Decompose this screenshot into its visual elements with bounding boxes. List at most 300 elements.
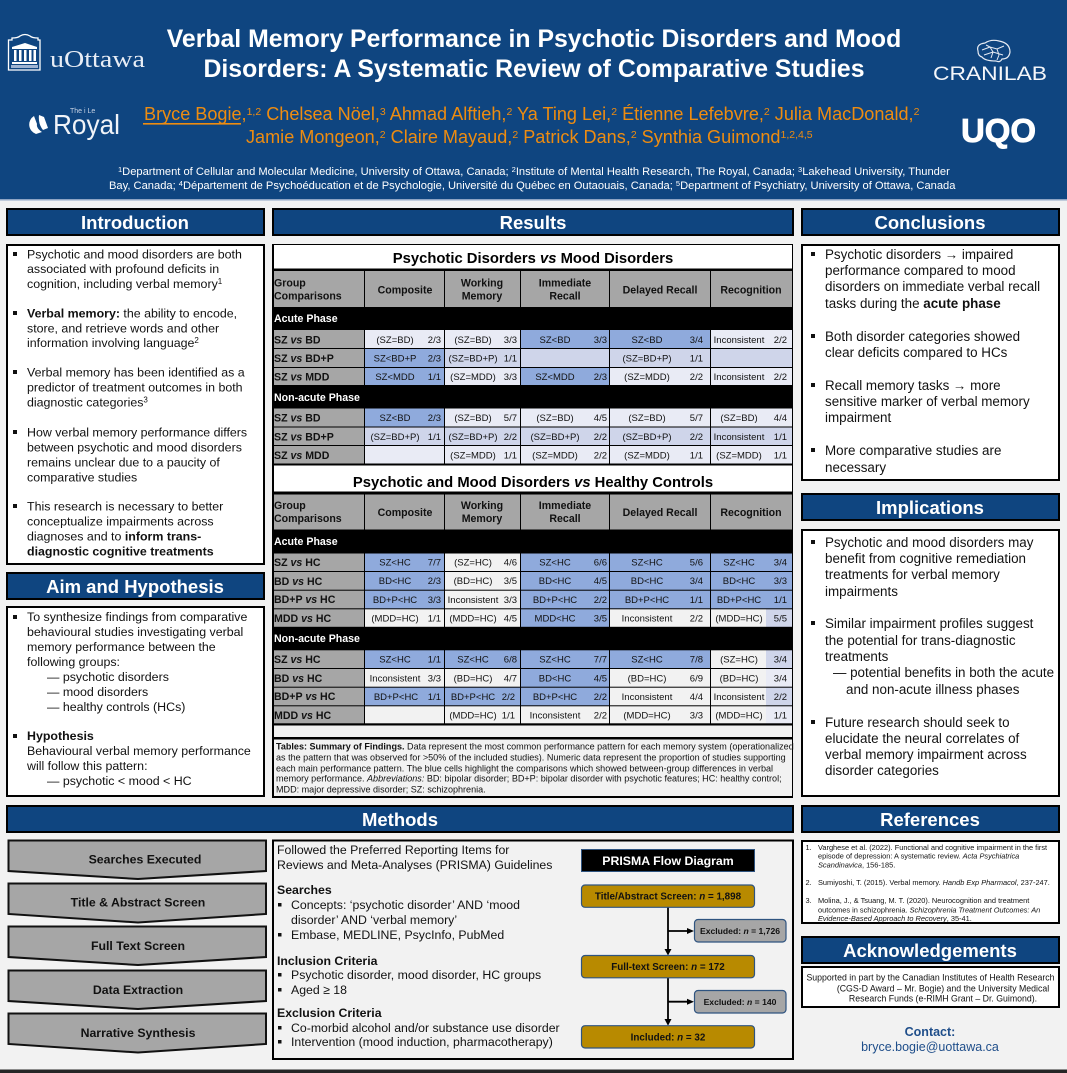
conclusion: psychotic disorders xyxy=(811,247,1040,311)
authors: Ahmad Alftieh, xyxy=(386,104,506,124)
hypothesis text: will follow this pattern: xyxy=(26,759,148,773)
PRISMA statement: Reviews and Meta-Analyses (PRISMA) Guidelines xyxy=(277,858,552,872)
search criteria: Concepts: ‘psychotic disorder’ AND ‘mood xyxy=(291,898,520,912)
row: SZ vs MDD acute: SZ<MDD xyxy=(375,372,415,383)
row: SZ vs HC non-acute: SZ<HC xyxy=(631,654,663,666)
inclusion criteria: Inclusion Criteria xyxy=(277,954,378,968)
hypothesis text: Behavioural verbal memory performance xyxy=(27,744,251,758)
row: SZ vs HC non-acute: 3/4 xyxy=(774,654,787,666)
row: BD vs HC non-acute: Inconsistent xyxy=(370,674,421,684)
table header row: Delayed Recall xyxy=(623,507,697,519)
row: BD vs HC acute xyxy=(274,572,792,590)
row: BD+P vs HC acute: 3/3 xyxy=(428,595,441,606)
chevron: data extraction: Data Extraction xyxy=(93,983,183,997)
row: MDD vs HC acute: 4/5 xyxy=(504,614,517,624)
row: MDD vs HC non-acute xyxy=(274,706,792,723)
row: BD+P vs HC non-acute: BD+P<HC xyxy=(451,692,495,703)
row: BD+P vs HC acute: 2/2 xyxy=(594,595,607,606)
row: SZ vs BD+P acute: SZ vs BD+P xyxy=(274,353,334,365)
row: BD+P vs HC non-acute: BD+P<HC xyxy=(374,692,418,703)
table caption: memory performance. Abbreviations: BD: bipolar disorder; BD+P: bipolar disorder with psychotic features; HC: healthy control; xyxy=(276,774,782,784)
bullet: deficits: 1 xyxy=(218,277,223,286)
row: BD vs HC acute: 3/3 xyxy=(774,576,787,587)
row: SZ vs BD non-acute: (SZ=BD) xyxy=(720,413,758,424)
row: SZ vs MDD acute: 3/3 xyxy=(504,372,517,383)
row: BD+P vs HC non-acute: Inconsistent xyxy=(622,692,673,703)
row: SZ vs BD+P non-acute: 2/2 xyxy=(594,432,607,443)
row: BD vs HC non-acute: 4/5 xyxy=(594,674,607,684)
implication: future research: Future research should seek to xyxy=(825,715,1010,730)
bullet: unclear: remains unclear due to a paucity of xyxy=(27,456,220,470)
row: SZ vs MDD non-acute: (SZ=MDD) xyxy=(624,450,670,462)
phase label: acute: Acute Phase xyxy=(274,536,338,548)
chevron: searches executed: Searches Executed xyxy=(89,852,201,866)
authors: Claire Mayaud, xyxy=(386,127,512,147)
row: SZ vs BD acute: SZ<BD xyxy=(540,335,571,346)
affiliations: Lakehead University, Thunder xyxy=(802,166,950,178)
table header row: Composite xyxy=(378,507,432,519)
implication: future research xyxy=(811,715,1027,778)
row: SZ vs MDD acute: SZ<MDD xyxy=(535,372,575,383)
affiliations: 3 xyxy=(798,165,802,174)
row: SZ vs BD+P non-acute: (SZ=BD+P) xyxy=(448,432,498,443)
row: MDD vs HC acute xyxy=(274,609,792,627)
row: MDD vs HC non-acute: Inconsistent xyxy=(530,710,581,722)
row: SZ vs BD+P non-acute: Inconsistent xyxy=(714,432,765,443)
table title: disorders vs healthy controls: Psychotic and Mood Disorders vs Healthy Controls xyxy=(353,475,713,491)
phase label: non-acute: Non-acute Phase xyxy=(274,633,360,645)
reference 3 xyxy=(806,896,1040,923)
reference 2: 2. xyxy=(806,878,812,887)
row: SZ vs HC acute: 6/6 xyxy=(594,558,607,568)
row: SZ vs BD+P non-acute: 2/2 xyxy=(504,432,517,443)
implication: remediation: treatments for verbal memory xyxy=(825,567,1000,582)
row: SZ vs BD acute xyxy=(274,330,792,348)
chevron: full text screen: Full Text Screen xyxy=(91,939,185,953)
bullet: predictor: Verbal memory has been identified as a xyxy=(27,366,245,380)
affiliations: Bay, Canada; xyxy=(109,180,176,192)
row: BD vs HC non-acute: (BD=HC) xyxy=(628,674,666,684)
chevron: searches executed xyxy=(8,840,266,879)
aim text: — mood disorders xyxy=(47,685,148,699)
flow box: full-text screen xyxy=(582,956,754,978)
logo: UQO: UQO xyxy=(961,112,1036,149)
aim text: following groups: xyxy=(27,655,120,669)
authors: Ya Ting Lei, xyxy=(512,104,611,124)
section heading: Implications xyxy=(802,494,1059,520)
row: MDD vs HC non-acute: 2/2 xyxy=(594,710,607,722)
chevron: title and abstract screen: Title & Abstract Screen xyxy=(71,896,205,910)
row: SZ vs HC acute: 5/6 xyxy=(690,558,703,568)
panel: conclusions xyxy=(802,245,1059,480)
logo: Cranilab: CRANILAB xyxy=(933,63,1047,85)
row: MDD vs HC acute: MDD vs HC xyxy=(274,613,331,625)
row: SZ vs BD acute: SZ<BD xyxy=(632,335,663,346)
header banner xyxy=(0,0,1067,200)
chevron: title and abstract screen xyxy=(8,884,266,922)
row: SZ vs MDD non-acute xyxy=(274,446,792,464)
section heading: Introduction: Introduction xyxy=(81,212,189,233)
row: MDD vs HC non-acute: (MDD=HC) xyxy=(623,710,671,722)
row: SZ vs HC non-acute: SZ<HC xyxy=(379,654,411,666)
aim text: To synthesize findings from comparative xyxy=(27,610,247,624)
affiliations: Department of Psychiatry, University of Ottawa, Canada xyxy=(680,180,956,192)
row: BD vs HC non-acute: (BD=HC) xyxy=(454,674,492,684)
row: BD+P vs HC acute: BD+P<HC xyxy=(373,595,417,606)
row: BD+P vs HC non-acute: 2/2 xyxy=(594,692,607,703)
row: MDD vs HC acute: MDD<HC xyxy=(535,614,576,624)
contact xyxy=(861,1025,999,1054)
row: SZ vs BD+P acute: 1/1 xyxy=(504,354,517,364)
conclusion: psychotic disorders: performance compared to mood xyxy=(825,263,1016,278)
search criteria xyxy=(277,883,520,942)
bullet: predictor: diagnostic categories xyxy=(27,396,143,410)
affiliations xyxy=(109,165,956,192)
bullet: rationale: This research is necessary to better xyxy=(27,500,223,514)
row: SZ vs HC non-acute: SZ vs HC xyxy=(274,654,321,666)
bullet: unclear: comparative studies xyxy=(27,470,137,484)
affiliations: 5 xyxy=(676,179,680,188)
conclusion: recall tasks: sensitive marker of verbal memory xyxy=(825,394,1030,409)
row: BD vs HC acute: BD<HC xyxy=(723,576,755,587)
methods process chevrons xyxy=(8,840,266,1052)
table header row: Comparisons xyxy=(274,513,342,525)
table header row: Recall xyxy=(549,513,581,525)
PRISMA statement: Followed the Preferred Reporting Items for xyxy=(277,843,509,857)
conclusion: psychotic disorders: disorders on immediate verbal recall xyxy=(825,279,1040,294)
panel: introduction xyxy=(7,245,264,564)
table header row: Recognition xyxy=(720,284,782,296)
row: SZ vs MDD acute xyxy=(274,368,792,385)
authors: 2 xyxy=(380,129,386,141)
row: SZ vs MDD non-acute: SZ vs MDD xyxy=(274,450,330,462)
row: SZ vs MDD acute: 2/3 xyxy=(594,372,607,383)
implication: trans-diagnostic: and non-acute illness phases xyxy=(846,682,1020,697)
row: BD vs HC non-acute: (BD=HC) xyxy=(720,674,758,684)
conclusion: clear deficits: Both disorder categories showed xyxy=(825,329,1020,344)
table: disorders vs healthy controls xyxy=(274,494,792,723)
bullet: verbal memory definition: 2 xyxy=(194,336,199,345)
row: SZ vs BD acute: Inconsistent xyxy=(714,335,765,346)
row: BD vs HC acute: 3/5 xyxy=(504,576,517,587)
affiliations: 2 xyxy=(512,165,516,174)
row: MDD vs HC non-acute: MDD vs HC xyxy=(274,710,331,722)
table caption: each main performance pattern. The blue cells highlight the comparisons which showed between-group differences in verbal xyxy=(276,764,773,774)
row: SZ vs BD+P non-acute: 1/1 xyxy=(774,432,787,443)
authors: Bryce Bogie, xyxy=(144,104,247,124)
row: BD vs HC non-acute: 6/9 xyxy=(690,674,703,684)
phase label: acute: Acute Phase xyxy=(274,313,338,325)
search criteria: Embase, MEDLINE, PsycInfo, PubMed xyxy=(291,928,504,942)
panel: results tables xyxy=(272,244,794,798)
row: MDD vs HC acute: 2/2 xyxy=(690,614,703,624)
row: BD+P vs HC non-acute: 4/4 xyxy=(690,692,703,703)
authors: Étienne Lefebvre, xyxy=(617,104,764,124)
reference 1: 1. xyxy=(806,843,812,852)
panel: references xyxy=(802,841,1059,923)
table header row: Delayed Recall xyxy=(623,284,697,296)
panel: acknowledgements xyxy=(802,967,1059,1007)
row: BD vs HC non-acute: BD<HC xyxy=(539,674,571,684)
row: SZ vs BD non-acute: 2/3 xyxy=(428,413,441,424)
implication: trans-diagnostic: Similar impairment profiles suggest xyxy=(825,616,1034,631)
inclusion criteria xyxy=(277,954,541,997)
search criteria: Searches xyxy=(277,883,332,897)
row: BD vs HC acute: 2/3 xyxy=(428,576,441,587)
row: SZ vs BD non-acute: 5/7 xyxy=(504,413,517,424)
row: SZ vs BD+P non-acute: 2/2 xyxy=(690,432,703,443)
hypothesis text: — psychotic < mood < HC xyxy=(47,774,192,788)
flow box: title abstract screen xyxy=(582,885,754,907)
bullet: rationale: diagnoses and to inform trans- xyxy=(27,530,201,544)
section heading: Aim and Hypothesis: Aim and Hypothesis xyxy=(46,576,224,597)
section heading: Acknowledgements: Acknowledgements xyxy=(843,940,1017,961)
row: SZ vs MDD acute: 1/1 xyxy=(428,372,441,383)
row: SZ vs BD+P non-acute: (SZ=BD+P) xyxy=(370,432,420,443)
flow box: title abstract screen: Title/Abstract Screen: n = 1,898 xyxy=(595,892,742,902)
row: SZ vs HC acute: SZ<HC xyxy=(631,558,663,568)
authors: 1,2 xyxy=(247,106,261,118)
row: SZ vs MDD acute: SZ vs MDD xyxy=(274,372,330,384)
conclusion: psychotic disorders: tasks during the acute phase xyxy=(825,296,1001,311)
flow box: included xyxy=(582,1026,754,1048)
row: BD vs HC acute: (BD=HC) xyxy=(454,576,492,587)
reference 1: episode of depression: A systematic review. Acta Psychiatrica xyxy=(818,852,1019,860)
reference 3: Evidence-Based Approach to Recovery, 35-41. xyxy=(818,914,972,923)
conclusion: more studies: necessary xyxy=(825,460,886,475)
exclusion criteria xyxy=(277,1006,560,1049)
table header row xyxy=(274,271,792,307)
row: BD+P vs HC acute: 1/1 xyxy=(690,595,703,606)
bullet: verbal memory definition: Verbal memory: the ability to encode, xyxy=(27,306,237,320)
logo: The Royal: The i Le xyxy=(70,108,95,115)
reference 3: outcomes in schizophrenia. Schizophrenia Treatment Outcomes: An xyxy=(818,906,1040,914)
table header row: Memory xyxy=(462,513,502,525)
row: MDD vs HC acute: (MDD=HC) xyxy=(715,614,763,624)
row: BD vs HC non-acute: 3/3 xyxy=(428,674,441,684)
section heading: Conclusions: Conclusions xyxy=(874,212,986,233)
authors: 2 xyxy=(506,106,512,118)
row: SZ vs BD non-acute: SZ vs BD xyxy=(274,412,321,424)
implication: trans-diagnostic: treatments xyxy=(825,649,889,664)
implication: trans-diagnostic: — potential benefits in both the acute xyxy=(833,665,1054,680)
row: SZ vs BD acute: SZ vs BD xyxy=(274,334,321,346)
row: SZ vs HC non-acute xyxy=(274,650,792,668)
implication: remediation xyxy=(811,535,1034,599)
inclusion criteria: Aged ≥ 18 xyxy=(291,983,347,997)
row: SZ vs BD non-acute: 4/5 xyxy=(594,413,607,424)
panel: methods details xyxy=(273,840,793,1059)
bullet: deficits: Psychotic and mood disorders are both xyxy=(27,248,242,262)
row: MDD vs HC non-acute: 3/3 xyxy=(690,710,703,722)
PRISMA flow diagram xyxy=(582,850,786,1048)
section heading: Conclusions xyxy=(802,209,1059,235)
row: SZ vs MDD acute: Inconsistent xyxy=(714,372,765,383)
table title: psychotic vs mood: Psychotic Disorders vs Mood Disorders xyxy=(393,251,673,267)
reference 1: Varghese et al. (2022). Functional and cognitive impairment in the first xyxy=(818,843,1047,852)
chevron: data extraction xyxy=(8,970,266,1009)
bullet: rationale: conceptualize impairments across xyxy=(27,514,214,528)
exclusion criteria: Exclusion Criteria xyxy=(277,1006,382,1020)
row: BD vs HC non-acute: 4/7 xyxy=(504,674,517,684)
aim text: — psychotic disorders xyxy=(47,670,169,684)
aim text xyxy=(13,610,247,714)
reference 2: Sumiyoshi, T. (2015). Verbal memory. Handb Exp Pharmacol, 237-247. xyxy=(818,878,1050,887)
row: SZ vs MDD non-acute: (SZ=MDD) xyxy=(450,450,496,462)
table header row: Composite xyxy=(378,284,432,296)
flow box: full-text screen: Full-text Screen: n = 172 xyxy=(611,962,725,973)
row: SZ vs BD acute: 2/2 xyxy=(774,335,787,346)
row: SZ vs HC non-acute: 1/1 xyxy=(428,654,441,666)
flow box: included: Included: n = 32 xyxy=(631,1032,706,1043)
flow box: excluded 1726: Excluded: n = 1,726 xyxy=(700,926,780,936)
row: MDD vs HC non-acute: 1/1 xyxy=(774,710,787,722)
row: BD vs HC non-acute: BD vs HC xyxy=(274,673,323,685)
row: BD vs HC non-acute: 3/4 xyxy=(774,674,787,684)
table title: psychotic vs mood xyxy=(274,245,792,268)
reference 3: Molina, J., & Tsuang, M. T. (2020). Neurocognition and treatment xyxy=(818,896,1029,905)
section heading: Acknowledgements xyxy=(802,937,1059,963)
affiliations: Department of Cellular and Molecular Medicine, University of Ottawa, Canada; xyxy=(122,166,512,178)
table header row: Group xyxy=(274,278,306,290)
logo: The Royal xyxy=(29,108,120,140)
section heading: Implications: Implications xyxy=(876,497,984,518)
bullet: verbal memory definition: store, and retrieve words and other xyxy=(27,322,219,336)
panel: acknowledgements: (CGS-D Award – Mr. Bogie) and the University Medical xyxy=(837,984,1049,994)
authors: 2 xyxy=(611,106,617,118)
authors xyxy=(143,104,920,147)
row: SZ vs BD+P non-acute: (SZ=BD+P) xyxy=(530,432,580,443)
implication: future research: elucidate the neural correlates of xyxy=(825,731,1020,746)
conclusion: psychotic disorders: Psychotic disorders → impaired xyxy=(825,247,1013,262)
panel: aim and hypothesis xyxy=(7,607,264,796)
row: SZ vs HC acute: (SZ=HC) xyxy=(454,558,492,568)
row: BD+P vs HC acute: Inconsistent xyxy=(448,595,499,606)
bullet: predictor: 3 xyxy=(143,396,148,404)
row: SZ vs HC acute: SZ vs HC xyxy=(274,557,321,569)
row: SZ vs BD acute: 3/3 xyxy=(504,335,517,346)
row: BD+P vs HC acute: 3/3 xyxy=(504,595,517,606)
row: SZ vs BD+P non-acute: (SZ=BD+P) xyxy=(622,432,672,443)
row: SZ vs MDD non-acute: 1/1 xyxy=(504,450,517,462)
row: MDD vs HC acute: (MDD=HC) xyxy=(449,614,497,624)
row: SZ vs BD non-acute: 5/7 xyxy=(690,413,703,424)
row: SZ vs BD+P acute: (SZ=BD+P) xyxy=(622,354,672,364)
bullet: predictor: predictor of treatment outcomes in both xyxy=(27,380,243,394)
bullet: predictor xyxy=(13,366,245,410)
reference 3: 3. xyxy=(806,896,812,905)
authors: 1,2,4,5 xyxy=(780,129,813,141)
flow title xyxy=(582,850,754,872)
row: SZ vs BD non-acute: (SZ=BD) xyxy=(628,413,666,424)
bullet: verbal memory definition xyxy=(13,306,237,350)
affiliations: 4 xyxy=(179,179,183,188)
row: BD+P vs HC non-acute: 2/2 xyxy=(774,692,787,703)
title xyxy=(167,26,901,83)
implication: remediation: benefit from cognitive remediation xyxy=(825,551,1026,566)
row: SZ vs HC non-acute: 7/7 xyxy=(594,654,607,666)
row: SZ vs BD acute: 3/4 xyxy=(690,335,703,346)
row: BD+P vs HC acute: 1/1 xyxy=(774,595,787,606)
phase label: non-acute: Non-acute Phase xyxy=(274,392,360,404)
bullet: deficits xyxy=(13,248,242,291)
row: BD+P vs HC acute: BD+P<HC xyxy=(625,595,669,606)
bullet: unclear xyxy=(13,426,247,484)
bullet: unclear: between psychotic and mood disorders xyxy=(27,440,242,454)
aim text: behavioural studies investigating verbal xyxy=(27,625,243,639)
conclusion: recall tasks: impairment xyxy=(825,410,892,425)
section heading: Results: Results xyxy=(500,212,566,233)
row: BD vs HC acute: BD<HC xyxy=(379,576,411,587)
authors: 2 xyxy=(764,106,770,118)
chevron: full text screen xyxy=(8,926,266,965)
section heading: Aim and Hypothesis xyxy=(7,573,264,599)
row: SZ vs MDD acute: 2/2 xyxy=(690,372,703,383)
bullet: rationale: diagnostic cognitive treatments xyxy=(27,544,214,558)
row: SZ vs HC acute: SZ<HC xyxy=(539,558,571,568)
row: SZ vs HC non-acute: SZ<HC xyxy=(539,654,571,666)
table header row: Working xyxy=(461,500,503,512)
row: SZ vs BD non-acute: SZ<BD xyxy=(380,413,411,424)
bullet: verbal memory definition: information involving language xyxy=(27,336,194,350)
section heading: Introduction xyxy=(7,209,264,235)
row: SZ vs BD+P non-acute: 1/1 xyxy=(428,432,441,443)
table caption: Tables: Summary of Findings. Data represent the most common performance pattern for each memory system (operationalized xyxy=(276,742,794,752)
logo: uOttawa xyxy=(8,34,145,73)
row: SZ vs BD+P non-acute: SZ vs BD+P xyxy=(274,432,334,444)
row: BD+P vs HC acute xyxy=(274,591,792,608)
row: BD+P vs HC acute: BD+P<HC xyxy=(533,595,577,606)
row: SZ vs MDD acute: (SZ=MDD) xyxy=(450,372,496,383)
row: SZ vs HC acute: 4/6 xyxy=(504,558,517,568)
panel: acknowledgements: Supported in part by the Canadian Institutes of Health Research xyxy=(806,972,1055,982)
affiliations: 1 xyxy=(118,165,122,174)
row: BD+P vs HC non-acute: Inconsistent xyxy=(714,692,765,703)
table header row: Recall xyxy=(549,290,581,302)
implication: future research: verbal memory impairment across xyxy=(825,747,1027,762)
PRISMA statement xyxy=(277,843,552,872)
conclusion: clear deficits: clear deficits compared to HCs xyxy=(825,345,1008,360)
implication: trans-diagnostic: the potential for trans-diagnostic xyxy=(825,633,1016,648)
flow title: PRISMA Flow Diagram xyxy=(602,854,734,868)
row: SZ vs MDD non-acute: 1/1 xyxy=(690,450,703,462)
row: SZ vs HC acute: SZ<HC xyxy=(379,558,411,568)
authors: 3 xyxy=(380,106,386,118)
logo: uOttawa: uOttawa xyxy=(50,47,145,73)
row: BD vs HC acute: BD<HC xyxy=(539,576,571,587)
row: MDD vs HC acute: 5/5 xyxy=(774,614,787,624)
table: psychotic vs mood disorders xyxy=(274,271,792,464)
flow box: excluded 140 xyxy=(694,990,786,1013)
inclusion criteria: Psychotic disorder, mood disorder, HC groups xyxy=(291,968,541,982)
row: BD vs HC acute: 3/4 xyxy=(690,576,703,587)
search criteria: disorder’ AND ‘verbal memory’ xyxy=(291,913,457,927)
exclusion criteria: Intervention (mood induction, pharmacotherapy) xyxy=(291,1035,553,1049)
table caption: as the pattern that was observed for >50% of the included studies). Numeric data represent the proportion of studies supporting xyxy=(276,752,786,762)
table caption: MDD: major depressive disorder; SZ: schizophrenia. xyxy=(276,784,486,794)
row: SZ vs BD acute: 3/3 xyxy=(594,335,607,346)
row: BD+P vs HC acute: BD+P vs HC xyxy=(274,594,336,606)
row: SZ vs BD non-acute: (SZ=BD) xyxy=(454,413,492,424)
row: SZ vs MDD acute: (SZ=MDD) xyxy=(624,372,670,383)
row: SZ vs BD non-acute xyxy=(274,408,792,426)
table header row: Working xyxy=(461,278,503,290)
row: MDD vs HC non-acute: (MDD=HC) xyxy=(449,710,497,722)
authors: Chelsea Nöel, xyxy=(261,104,380,124)
row: SZ vs BD acute: 2/3 xyxy=(428,335,441,346)
row: SZ vs HC non-acute: 6/8 xyxy=(504,654,517,666)
row: SZ vs MDD non-acute: (SZ=MDD) xyxy=(716,450,762,462)
